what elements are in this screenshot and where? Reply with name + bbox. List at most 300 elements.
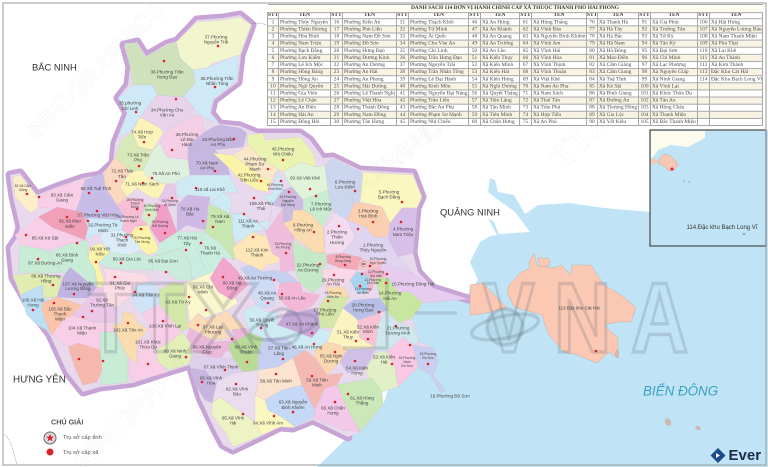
commune names: Tiến [138,134,147,140]
commune names: 50.Xã An Lão [278,296,306,300]
table: list of 114 administrative units: Xã Hà Đông [599,47,626,53]
commune names: 51.Xã Kiến [337,330,359,334]
table: list of 114 administrative units: 49 [472,40,477,46]
commune names: 111.Xã An [238,218,259,224]
small commune names: Gia Viên [370,274,382,278]
table: list of 114 administrative units: Xã Nam Sách [533,90,563,96]
commune 113 Cat Hai island [470,253,636,363]
watermark VNA: A [631,263,688,373]
table: list of 114 administrative units: Xã Gia Lộc [599,111,624,117]
commune names: 44.Phường [244,156,267,162]
commune names: Thuận [240,350,253,354]
small commune names: Đông [131,205,139,209]
table: list of 114 administrative units: Xã Thượng Hồng [599,104,637,110]
small commune names: Hồng Bàng [335,259,351,263]
commune names: 32.Phường Từ [88,222,118,228]
commune names: Lưu Kiếm [335,184,355,190]
region label: Hung Yen: HƯNG YÊN [13,374,66,386]
commune names: 7.Phường [311,202,332,206]
table: list of 114 administrative units: Xã An Khánh [482,26,512,32]
small commune names: Thanh Nghị [119,219,137,223]
small commune names: Kinh Môn [268,187,282,191]
small commune names: 26.Phường Lê [117,215,139,219]
commune names: Bỉnh Khiêm [281,404,305,410]
commune names: Hoà Bình [359,214,378,218]
table: list of 114 administrative units: Xã Việt Khê [533,76,560,82]
commune names: Minh [363,329,373,334]
table: list of 114 administrative units: DANH SÁCH 114 ĐƠN VỊ HÀNH CHÍNH CẤP XÃ THUỘC THÀNH PHỐ HẢI PHÒNG [411,5,619,11]
table: list of 114 administrative units: Phường Nam Đồng [344,111,386,117]
table: list of 114 administrative units: 53 [472,69,477,75]
small commune names: 18.Phường [399,356,415,360]
table: list of 114 administrative units: 35 [400,47,405,53]
table: list of 114 administrative units: 42 [400,97,405,103]
small commune names: Kiến An [327,295,339,299]
commune names: 113.Đặc khu Cát Hải [558,306,600,310]
table: list of 114 administrative units: 23 [334,69,339,75]
commune names: Điền [65,224,75,229]
table: list of 114 administrative units: Xã Chí Minh [652,54,680,60]
legend: Trụ sở cấp xã [63,449,99,456]
table: list of 114 administrative units: 22 [334,61,339,68]
commune names: 27.Phường Việt Hòa [77,212,119,218]
commune names: 37.Phường [205,34,228,40]
table: list of 114 administrative units: Xã Hợp Tiến [533,111,561,117]
commune names: Giang [56,198,68,202]
table: list of 114 administrative units: 26 [334,90,339,96]
table: list of 114 administrative units: 14 [270,111,276,117]
commune names: Tân [118,174,126,179]
table: list of 114 administrative units: 114 [700,76,707,82]
table: list of 114 administrative units: 33 [400,33,405,39]
table: list of 114 administrative units: Phường Hải Dương [344,83,386,89]
small commune names: 46.Phường [267,183,283,187]
table: list of 114 administrative units: 16 [334,19,339,25]
table: list of 114 administrative units: Xã Nghi Dương [482,83,517,89]
logo: Ever: Ever [728,447,761,464]
commune names: 98.Xã Nguyên [193,344,222,350]
small commune names: Tân Hưng [135,240,150,244]
table: list of 114 administrative units: Phường Hải An [280,111,314,117]
commune names: 60.Xã Chấn [321,406,345,410]
table: list of 114 administrative units: Phường Lê Chân [280,97,317,103]
commune names: 106.Xã Hải [22,298,44,302]
table: list of 114 administrative units: Phường Thạch Khôi [410,19,454,25]
commune names: 22.Phường [297,262,320,268]
commune names: 75.Xã An Phú [152,171,180,176]
small commune names: Đồ Sơn [422,356,434,360]
table: list of 114 administrative units: 2 [272,26,274,32]
commune names: Nam [215,219,225,224]
commune names: 5.Phường [379,190,400,194]
table: list of 114 administrative units: 85 [589,83,595,89]
commune labels and dots [25,45,597,417]
table: list of 114 administrative units: 27 [334,97,339,103]
table: list of 114 administrative units: 69 [523,76,528,82]
table: list of 114 administrative units: 101 [640,90,649,96]
table: list of 114 administrative units: 61 [523,19,528,25]
commune names: 110.xã Lai Khê [195,187,225,192]
table: list of 114 administrative units: 34 [400,40,405,46]
table: list of 114 administrative units: Xã Trường Tân [652,26,685,32]
small commune names: Lê Chân [367,281,379,285]
table: list of 114 administrative units: 72 [523,97,528,103]
commune names: 1.Phường [363,242,384,248]
table: list of 114 administrative units: Xã Chấn Hưng [482,118,515,124]
commune names: Minh [198,290,208,294]
table: list of 114 administrative units: Phường Thủy Nguyên [280,19,328,25]
table: list of 114 administrative units: Phường An Dương [344,61,385,68]
commune names: Bắc [186,210,195,216]
table: list of 114 administrative units: 44 [400,111,405,117]
table: list of 114 administrative units: Phường Hồng Bàng [280,69,323,75]
commune names: Phượng [205,330,222,334]
table: list of 114 administrative units: Phường Nguyễn Đại Năng [410,90,467,96]
small commune names: Ái Quốc [164,203,176,207]
table: list of 114 administrative units: Xã Tứ Kỳ [652,33,674,39]
commune names: Minh [312,382,322,388]
commune names: 4.Phường [393,226,414,232]
legend: Trụ sở cấp tỉnh [63,434,102,441]
commune names: Hương [330,240,345,245]
commune names: 48.Xã An [258,290,277,296]
table: list of 114 administrative units: Phường Tân Hưng [344,118,384,124]
commune names: An Phụ [211,142,226,147]
commune names: Hải An [383,296,397,301]
table: list of 114 administrative units: Phường Lưu Kiếm [280,54,320,60]
table: list of 114 administrative units: Phường Kiến An [344,19,380,25]
table: list of 114 administrative units: Phường Nhị Chiểu [410,118,451,124]
table: list of 114 administrative units: 95 [642,47,647,53]
table: list of 114 administrative units: Xã Thanh Miện [652,111,686,117]
table: list of 114 administrative units: 9 [272,76,274,82]
table: list of 114 administrative units: Phường Thiên Hương [280,26,327,32]
commune names: Đông [227,286,238,290]
commune fills [10,15,468,450]
table: list of 114 administrative units: Xã Tiên Minh [482,111,512,117]
commune names: 69.Xã Việt Khê [290,176,320,180]
commune names: 83.Xã Cẩm [51,192,74,198]
table: list of 114 administrative units: 60 [472,118,477,124]
commune names: Bảo [233,392,241,396]
commune names: 74.Xã Hợp [131,130,153,134]
faint diagonal watermarks [21,0,616,467]
commune names: 34.Phường Chu [151,108,184,112]
logo: Ever [710,447,761,464]
commune names: 49.Xã An Trường [238,276,273,280]
small commune names: 16.Phường [325,291,341,295]
small commune names: Đồ Sơn [401,364,413,368]
table: list of 114 administrative units: Phường An Phong [344,76,384,82]
small commune names: 13.Phường [355,287,371,291]
table: list of 114 administrative units: Xã Tân Minh [482,104,511,110]
table: list of 114 administrative units: Phường Nguyễn Trãi [410,61,455,68]
table: list of 114 administrative units: 70 [523,83,528,89]
table: list of 114 administrative units: Phường Kinh Môn [410,83,451,89]
legend: CHÚ GIẢI [51,418,83,426]
commune names: 89.Xã Gia Lộc [113,256,142,262]
region label: Quang Ninh: QUẢNG NINH [440,206,500,218]
small commune names: An Phong [276,246,290,250]
commune names: 42.Phường [238,172,261,178]
commune names: 85.Xã Kẻ Sặt [32,236,59,240]
commune names: 95.Xã Đại Sơn [148,258,178,264]
legend [44,418,102,456]
table: list of 114 administrative units: Xã Vĩnh Hòa [533,54,562,60]
table: list of 114 administrative units: 32 [400,26,405,32]
table: list of 114 administrative units: Xã An Lão [482,47,506,53]
table: list of 114 administrative units: Phường Phù Liễn [344,26,382,32]
table: list of 114 administrative units: 17 [334,26,339,32]
commune names: Hòa [207,380,216,386]
sea label: Bien Dong: BIỂN ĐÔNG [643,384,718,398]
commune names: Giang [61,258,73,262]
table: list of 114 administrative units: 18 [334,33,339,39]
table: list of 114 administrative units: Xã Khúc Thừa Dụ [652,90,692,96]
commune names: 88.Xã Thượng [31,274,61,278]
commune names: 93.Xã Tứ Kỳ [165,300,191,304]
commune names: Thái [257,206,265,211]
commune names: Hải [381,360,387,364]
table: list of 114 administrative units: Phường Bắc An Phụ [410,104,454,110]
commune names: 47.Xã An Khánh [286,322,319,326]
commune names: 79.Xã Hà [211,214,230,219]
faint diagonal watermarks: INFOGRAPHICS [337,107,456,209]
table: list of 114 administrative units: 86 [589,90,595,96]
commune names: 15.Phường Đông Hải [392,282,434,286]
table: list of 114 administrative units: 7 [272,61,274,68]
table: list of 114 administrative units: 10 [270,83,276,89]
small commune names: Nam [404,360,411,364]
commune names [22,34,600,426]
commune names: Thừa Dụ [139,344,157,350]
commune names: Chí Linh [122,106,139,111]
table: list of 114 administrative units: Phường Ái Quốc [410,33,447,39]
table: list of 114 administrative units: Phường Gia Viên [280,90,317,96]
commune names: 70.Xã Nam [196,160,219,166]
small commune names: 40.Phường [144,204,160,208]
table: list of 114 administrative units: 30 [334,118,339,124]
small islands [615,350,701,430]
commune names: 62.Xã Vĩnh [226,386,249,392]
table: list of 114 administrative units: Phường An Biên [280,104,316,110]
table: list of 114 administrative units: 51 [472,54,477,60]
table: list of 114 administrative units: Xã Yết Kiêu [599,118,626,124]
commune names: Hưng [27,302,39,308]
table: list of 114 administrative units: 40 [400,83,405,89]
table: list of 114 administrative units: Xã Lai Khê [711,47,736,53]
table: list of 114 administrative units: Phường Ngô Quyền [280,83,323,89]
commune names: 9.Phường [293,222,314,228]
table: list of 114 administrative units: 107 [699,26,708,32]
commune names: Hưng [327,410,339,416]
sea [317,130,768,467]
table: list of 114 administrative units: 112 [700,61,707,68]
table: list of 114 administrative units: 111 [700,54,707,60]
table: list of 114 administrative units: 96 [642,54,647,60]
table: list of 114 administrative units: Xã Hà Tây [599,26,623,32]
table: list of 114 administrative units: Phường Nam Đồ Sơn [344,33,391,39]
commune names: Thụy [343,334,354,340]
table: list of 114 administrative units: 80 [589,47,595,53]
commune names: 63.Xã Nguyễn [279,398,308,404]
small commune names: 24.Phường [275,242,291,246]
table: list of 114 administrative units: 25 [334,83,339,89]
table: list of 114 administrative units: 39 [400,76,405,82]
commune names: 66.Xã Vĩnh [200,376,223,380]
table: list of 114 administrative units: 58 [472,104,477,110]
commune names: Bạch Đằng [378,194,401,200]
table: list of 114 administrative units: Xã Kiến Hưng [482,76,514,82]
commune names: Hưng [351,370,363,376]
commune names: 21.Phường [387,326,410,330]
table: list of 114 administrative units: 92 [642,26,647,32]
table: list of 114 administrative units: Phường Trần Nhân Tông [410,69,464,75]
table: list of 114 administrative units: Xã An Trường [482,40,513,46]
table: list of 114 administrative units: Xã Quyết Thắng [482,90,518,96]
small commune names: Nguyễn [282,198,294,203]
table: list of 114 administrative units: Xã Hải Hưng [711,19,740,25]
table: list of 114 administrative units: Xã An Phú [533,118,557,124]
commune names: 102.Xã Tân An [113,328,143,332]
table: list of 114 administrative units: Phường Dương Kinh [344,54,389,60]
table: list of 114 administrative units: Xã An Quang [482,33,512,39]
table: list of 114 administrative units: 97 [642,61,647,68]
commune names: 73.Xã Trần [127,152,150,158]
commune names: Giang [169,354,181,358]
small commune names: Đại Năng [281,203,295,207]
commune names: Nam Triệu [393,232,414,237]
commune names: Nguyễn Trãi [204,38,228,44]
table: list of 114 administrative units: Xã Bình Giang [599,90,632,96]
table: list of 114 administrative units: Đặc Khu Cát Hải [711,69,748,75]
commune names: 52.Xã Kiến [357,324,379,330]
table: list of 114 administrative units: 110 [700,47,707,53]
small commune names: Ngô Quyền [370,261,387,265]
commune names: 68.Xã Vĩnh [235,344,258,350]
table: list of 114 administrative units: 59 [472,111,477,117]
commune names: 80.Xã Hà [223,280,242,286]
commune names: Hưng Đạo [157,74,178,80]
commune names: 19.Phường Đồ Sơn [430,394,470,398]
commune names: Kiêu [95,252,105,256]
table: list of 114 administrative units: Xã Nam An Phụ [533,83,568,89]
table: list of 114 administrative units: Xã Vĩnh Am [533,40,560,46]
commune names: Miện [77,330,87,336]
commune names: An Phụ [200,166,215,170]
table: list of 114 administrative units: 62 [523,26,528,32]
commune names: 46.Xã An Hưng [292,344,323,350]
small commune names: 11.Phường [368,270,384,274]
commune names: Thắng [256,322,269,328]
table: list of 114 administrative units: Xã Nguyễn Bỉnh Khiêm [533,33,586,39]
small commune names: 33.Phường [162,199,178,203]
commune names: Lê Ích Mộc [310,206,333,212]
table: list of 114 administrative units: Xã Nam Thanh Miện [711,33,757,39]
commune names: 78.Xã Hà [181,206,200,212]
table: list of 114 administrative units: Phường Trần Hưng Đạo [410,54,462,60]
commune names: Phúc [115,286,126,290]
table: list of 114 administrative units: Xã Cẩm Giang [599,69,631,75]
table: list of 114 administrative units: 65 [523,47,528,53]
table: list of 114 administrative units: 41 [400,90,405,96]
table: list of 114 administrative units: 84 [589,76,595,82]
commune names: 65.Xã Vĩnh [222,416,245,420]
table: list of 114 administrative units: Xã Thái Tân [533,97,560,103]
table: list of 114 administrative units: 3 [272,33,274,39]
commune names: 3.Phường [358,208,379,214]
commune names: Nhân Tông [206,81,229,86]
commune names: Khôi [117,242,127,248]
table: list of 114 administrative units: Xã Ninh Giang [652,76,685,82]
table: list of 114 administrative units: 48 [472,33,477,39]
commune names: Lương Bằng [65,285,91,291]
province HQ marker on map [361,261,366,267]
table: list of 114 administrative units: Xã Bắc Thanh Miện [652,118,696,124]
table: list of 114 administrative units: 37 [400,61,405,68]
small commune names: 8.Phường [336,255,351,259]
commune names: Lê Đại [180,137,194,142]
watermark VNA: T [88,263,133,373]
table: list of 114 administrative units: 52 [472,61,477,68]
commune names: Trần Liễu [240,176,259,182]
table: list of 114 administrative units: Xã Hà Bắc [599,33,623,39]
table: list of 114 administrative units: Phường Hưng Đạo [344,47,385,53]
commune names: 91.Xã Gia [110,280,131,286]
table: list of 114 administrative units: 99 [642,76,647,82]
watermark VNA [88,263,688,374]
table: list of 114 administrative units: 75 [523,118,528,124]
table: list of 114 administrative units: 77 [589,26,595,32]
commune names: 56.Xã Quyết [249,318,275,322]
table: list of 114 administrative units: 89 [589,111,595,117]
table: list of 114 administrative units: Xã Đại Sơn [652,47,677,53]
table: list of 114 administrative units: 113 [700,69,707,75]
table: list of 114 administrative units: 105 [640,118,649,124]
table: list of 114 administrative units: 79 [589,40,595,46]
commune names: 77.Xã Hải [177,236,197,240]
table: list of 114 administrative units: Phường Thành Đông [344,104,389,110]
table: list of 114 administrative units: 1 [272,19,274,25]
table: list of 114 administrative units: Xã Kiến Thụy [482,54,513,60]
table: list of 114 administrative units: Xã Tân Kỳ [652,40,676,46]
commune names: 99.Xã Ninh [164,348,187,354]
commune names: Hưng Đạo [353,308,374,312]
table: list of 114 administrative units: Xã Vĩnh Thịnh [533,61,565,68]
commune names: 81.Xã Mao [59,218,81,224]
table: list of 114 administrative units: 98 [642,69,647,75]
commune names: Hồng [41,278,52,284]
table: list of 114 administrative units: Phường Nam Triệu [280,40,321,46]
commune names: Thiên [331,234,343,240]
inset map: Bach Long Vi [650,130,766,246]
table: list of 114 administrative units: Xã Gia Phúc [652,19,680,25]
table: list of 114 administrative units: 109 [699,40,708,46]
table: list of 114 administrative units: Xã Kiến Hải [482,69,509,75]
table: list of 114 administrative units: 103 [640,104,649,110]
commune names: Quang [260,296,274,300]
table: list of 114 administrative units: 90 [589,118,595,124]
table: list of 114 administrative units: Xã Cẩm Giàng [599,61,631,68]
commune names: Văn An [160,112,175,118]
table: list of 114 administrative units: 4 [272,40,274,46]
commune names: 97.Xã Lạc [203,324,224,330]
table: list of 114 administrative units: 50 [472,47,477,53]
commune names: 92.Xã [96,298,108,302]
small commune names: Giàng [19,188,28,192]
commune names: 45.Phường [272,146,295,152]
table: list of 114 administrative units: 15 [270,118,276,124]
